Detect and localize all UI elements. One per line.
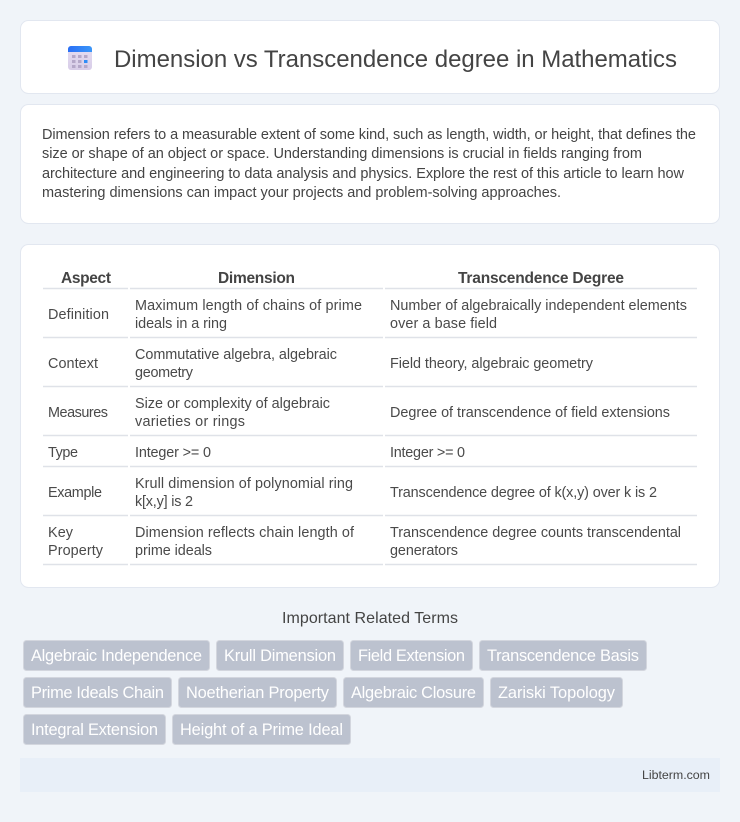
row: measures: Degree of transcendence of field extensions — [390, 405, 670, 421]
related term tags: Prime Ideals Chain — [31, 684, 164, 702]
row: example: k[x,y] is 2 — [135, 494, 193, 510]
row: key property: generators — [390, 543, 458, 559]
table header — [61, 270, 624, 287]
row: context — [48, 347, 594, 381]
related term tags: Transcendence Basis — [487, 647, 639, 665]
row: measures — [48, 396, 670, 430]
row: definition: Number of algebraically independent elements — [390, 298, 687, 314]
related term tags: Noetherian Property — [186, 684, 330, 702]
row: type: Integer >= 0 — [390, 445, 465, 461]
table header: Dimension — [218, 270, 295, 287]
row: example — [48, 476, 657, 510]
row: context: Commutative algebra, algebraic — [135, 347, 337, 363]
related term tags: Algebraic Closure — [351, 684, 476, 702]
related term tags: Field Extension — [358, 647, 465, 665]
related term tags — [24, 640, 646, 744]
related term tags: Krull Dimension — [224, 647, 336, 665]
footer — [20, 758, 720, 792]
row: key property: Transcendence degree counts transcendental — [390, 525, 681, 541]
row: example: Example — [48, 485, 102, 501]
row: key property — [48, 525, 681, 559]
intro text: mastering dimensions can impact your projects and problem-solving approaches. — [42, 185, 561, 201]
intro text: size or shape of an object or space. Understanding dimensions is crucial in fields ranging from — [42, 146, 642, 162]
row: type: Integer >= 0 — [135, 445, 211, 461]
row: definition: Definition — [48, 307, 109, 323]
related term tags: Zariski Topology — [498, 684, 616, 702]
row: definition — [48, 298, 687, 332]
panel: introduction — [20, 104, 720, 224]
row: definition: Maximum length of chains of prime — [135, 298, 362, 314]
intro text: architecture and engineering to data analysis and physics. Explore the rest of this article to learn how — [42, 166, 685, 182]
intro text: Dimension refers to a measurable extent of some kind, such as length, width, or height, that defines the — [42, 127, 696, 143]
row: definition: ideals in a ring — [135, 316, 227, 332]
row: context: Context — [48, 356, 98, 372]
panel: header — [20, 20, 720, 94]
heading: related terms: Important Related Terms — [282, 610, 458, 627]
title: Dimension vs Transcendence degree in Mathematics — [114, 46, 677, 73]
row: measures: varieties or rings — [135, 414, 245, 430]
related term tags: Integral Extension — [31, 721, 158, 739]
row: measures: Size or complexity of algebraic — [135, 396, 330, 412]
footer: Libterm.com — [642, 768, 710, 782]
table header: Aspect — [61, 270, 111, 287]
row: example: Krull dimension of polynomial ring — [135, 476, 353, 492]
row: definition: over a base field — [390, 316, 497, 332]
intro text — [42, 127, 696, 201]
row: key property: Key — [48, 525, 74, 541]
row: measures: Measures — [48, 405, 108, 421]
row: type: Type — [48, 445, 78, 461]
row: context: geometry — [135, 365, 194, 381]
row: key property: Property — [48, 543, 104, 559]
row: key property: prime ideals — [135, 543, 212, 559]
related term tags: Height of a Prime Ideal — [180, 721, 343, 739]
row: context: Field theory, algebraic geometry — [390, 356, 594, 372]
row: example: Transcendence degree of k(x,y) over k is 2 — [390, 485, 657, 501]
icon: calendar — [68, 46, 92, 70]
panel: comparison table — [20, 244, 720, 588]
table header: Transcendence Degree — [458, 270, 624, 287]
row: type — [48, 445, 465, 461]
row: key property: Dimension reflects chain length of — [135, 525, 355, 541]
related term tags: Algebraic Independence — [31, 647, 202, 665]
